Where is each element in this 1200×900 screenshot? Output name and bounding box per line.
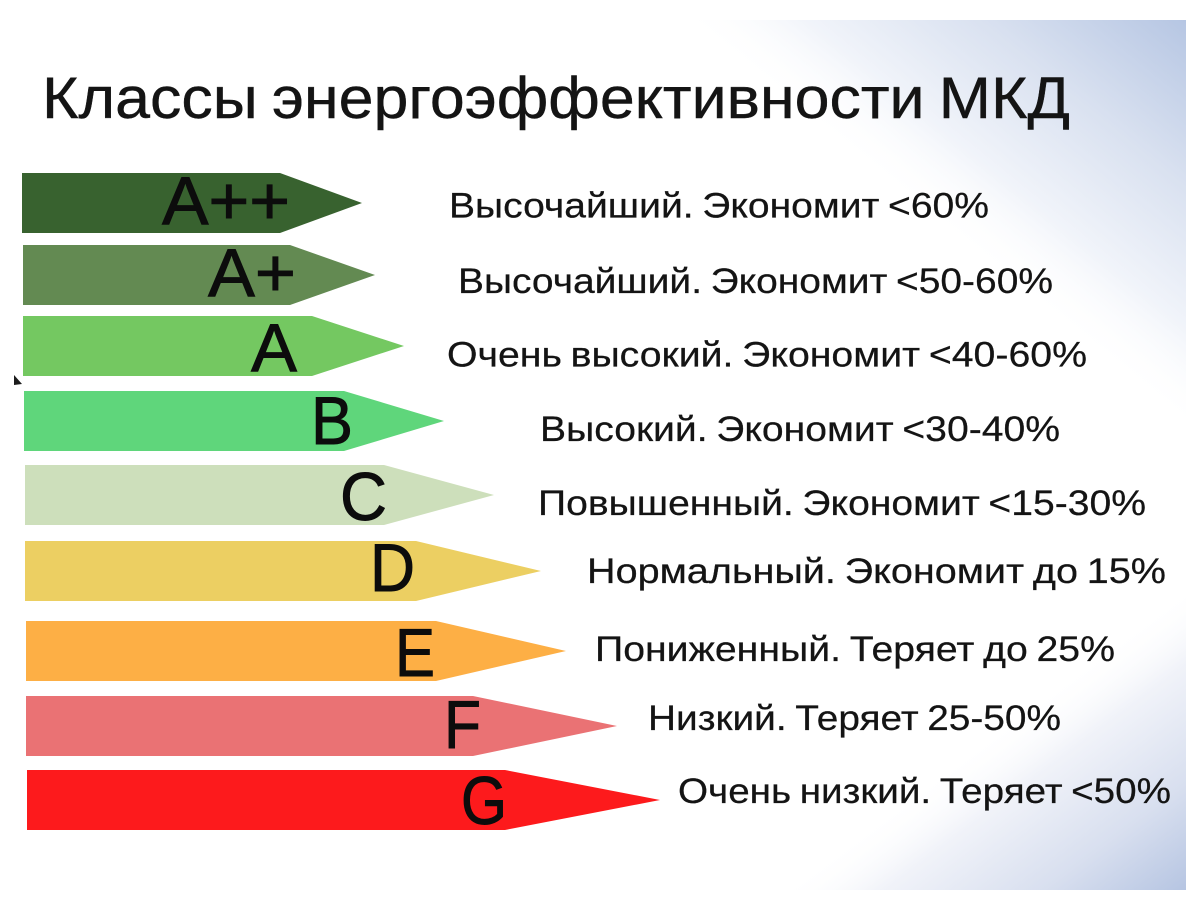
- title: Классы энергоэффективности МКД: [42, 66, 1070, 131]
- class row: A++: A++: [162, 163, 290, 239]
- class row: E: Пониженный. Теряет до 25%: [595, 629, 1115, 669]
- icon: small cursor mark: [14, 375, 22, 385]
- class row: A+: A+: [208, 235, 296, 311]
- class row: C: C: [340, 459, 387, 535]
- class row: E: E: [395, 615, 435, 691]
- class row: G: Очень низкий. Теряет <50%: [678, 771, 1171, 811]
- class row: B: Высокий. Экономит <30-40%: [540, 409, 1060, 449]
- class row: A++: [22, 163, 989, 239]
- class row: F: [26, 687, 1061, 763]
- class row: D: Нормальный. Экономит до 15%: [587, 551, 1166, 591]
- class row: C: [25, 459, 1146, 535]
- class row: B: [24, 383, 1060, 459]
- class row: A: A: [251, 310, 298, 386]
- class row: G: [27, 763, 1171, 839]
- class row: A+: [23, 235, 1053, 311]
- class row: C: Повышенный. Экономит <15-30%: [538, 483, 1146, 523]
- class row: A: [23, 310, 1087, 386]
- class row: B: B: [311, 383, 353, 459]
- class row: A++: Высочайший. Экономит <60%: [449, 186, 989, 226]
- class row: D: [25, 530, 1166, 606]
- class row: A: Очень высокий. Экономит <40-60%: [447, 334, 1087, 374]
- class row: D: D: [370, 530, 415, 606]
- class row: F: F: [444, 687, 481, 763]
- class row: G: G: [461, 763, 507, 839]
- class row: F: Низкий. Теряет 25-50%: [648, 698, 1061, 738]
- class row: E: [26, 615, 1115, 691]
- class row: A+: Высочайший. Экономит <50-60%: [458, 261, 1053, 301]
